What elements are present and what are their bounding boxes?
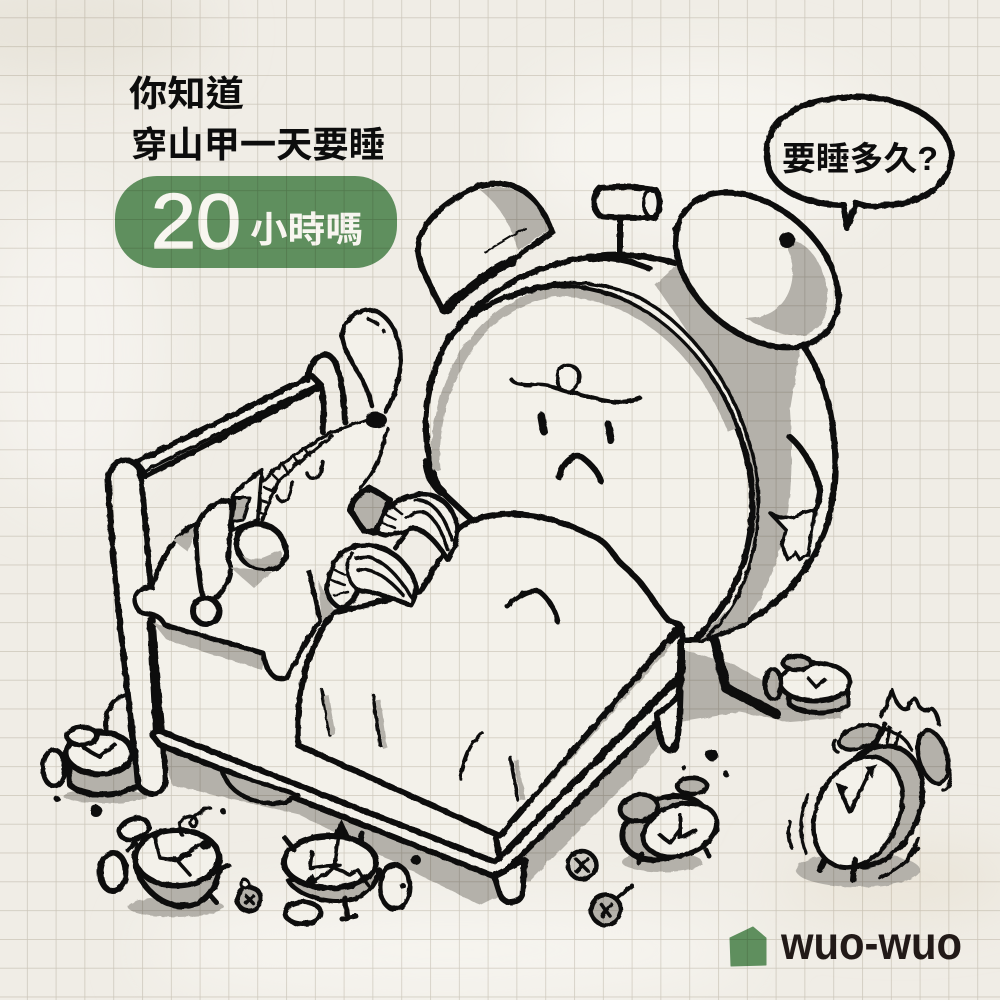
upper claw hand: [377, 494, 457, 560]
pangolin arm: [350, 488, 390, 532]
title line two: 穿山甲一天要睡: [131, 124, 385, 165]
clock back body: [440, 255, 835, 640]
dizzy grey clock: [613, 778, 724, 871]
pillow: [135, 523, 320, 679]
screw: [591, 886, 632, 925]
drawing: sleeping pangolin and alarm clock scene: [43, 97, 954, 925]
scales on head: [256, 436, 332, 522]
ringing squiggle: [881, 690, 939, 724]
clock face expression: [512, 365, 640, 481]
ringing clock: [789, 690, 954, 882]
big alarm clock: [418, 161, 869, 714]
title line one: 你知道: [129, 73, 244, 114]
face inner shading: [435, 292, 732, 470]
bed rail front: [152, 680, 680, 878]
left bell: [418, 183, 552, 311]
side crease: [512, 640, 672, 812]
logo: [730, 917, 962, 969]
bed side: [496, 628, 682, 858]
face left thick edge: [427, 462, 442, 492]
hours text: 小時嗎: [250, 209, 363, 250]
right bell: [645, 161, 869, 379]
broken clock one: [100, 808, 229, 906]
bed post left: [108, 461, 165, 794]
nose and snout: [232, 412, 387, 515]
green pill with 20 hours: [115, 176, 397, 268]
bubble text: 要睡多久?: [782, 140, 938, 177]
clock body shading: [655, 262, 800, 640]
clock face: [426, 287, 752, 640]
number 20: 20: [151, 177, 241, 265]
clock arm and hand: [770, 437, 820, 560]
pangolin claws: [327, 494, 457, 608]
left mattress edge: [150, 620, 156, 733]
bed: [108, 355, 682, 902]
tiny bell: [237, 880, 261, 911]
nut: [568, 851, 596, 879]
motion lines: [789, 740, 951, 878]
bed legs: [222, 640, 681, 902]
broken clock two: [284, 822, 410, 924]
blanket: [298, 514, 680, 836]
clock leg: [712, 630, 776, 714]
speech bubble: [767, 97, 951, 228]
ear: [342, 310, 401, 412]
pillow and pangolin: [135, 310, 401, 679]
headboard rail: [136, 355, 345, 476]
logo house icon: [730, 927, 766, 966]
mattress: [148, 625, 680, 858]
right floor clock: [765, 656, 850, 712]
knob on top: [590, 187, 660, 269]
blanket folds: [318, 580, 558, 800]
pangolin head and body: [240, 420, 386, 572]
nightcap: [193, 470, 286, 624]
lower claw hand: [327, 545, 416, 608]
floor shadows: [63, 650, 920, 917]
clock rim line: [452, 283, 758, 636]
logo wordmark: wuo-wuo: [780, 917, 962, 969]
closed eyes: [277, 462, 323, 501]
screws, nuts and dots: [54, 749, 729, 925]
small clock left of post: [43, 694, 138, 795]
title: [129, 73, 385, 165]
